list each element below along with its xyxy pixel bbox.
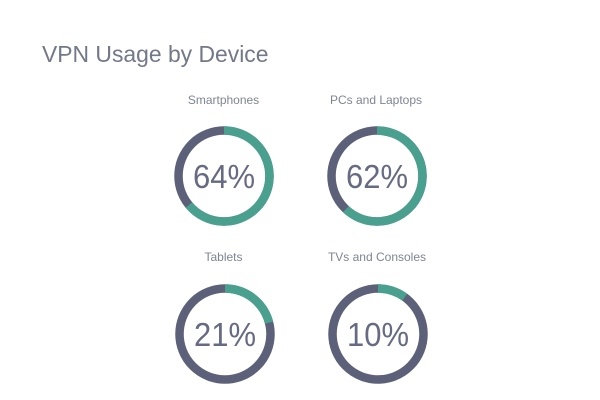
donut: TVs and consoles <box>328 250 426 380</box>
donut: TVs and consoles: TVs and Consoles <box>328 250 426 264</box>
donut: PCs and laptops <box>330 93 422 222</box>
donut: tablets: 21% <box>194 316 256 353</box>
title: VPN Usage by Device <box>42 41 268 67</box>
donut: TVs and consoles: 10% <box>347 316 409 353</box>
donut: tablets <box>180 250 270 380</box>
donut: PCs and laptops: 62% <box>346 158 408 195</box>
donut: smartphones <box>178 93 270 222</box>
donut: smartphones: 64% <box>193 158 255 195</box>
donut: smartphones: Smartphones <box>188 93 259 107</box>
donut: PCs and laptops: PCs and Laptops <box>330 93 422 107</box>
donut: tablets: Tablets <box>204 250 243 264</box>
